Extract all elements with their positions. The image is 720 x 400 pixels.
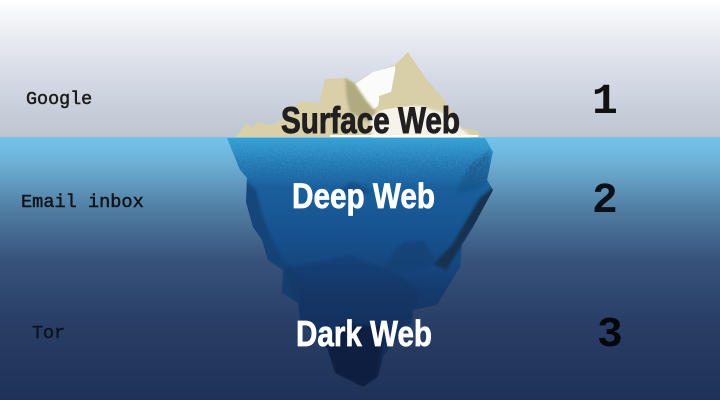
sea background [0,137,720,400]
iceberg below water [220,138,500,387]
sunlit facet [379,52,448,110]
centre facets [342,182,370,198]
label: Tor: Tor [32,323,65,344]
iceberg above water [235,52,482,137]
waterline highlight [330,135,478,137]
heading: Surface Web: Surface Web [281,100,460,141]
number 2: 2 [592,176,618,225]
lower snow band [370,106,472,137]
right shadow facet [434,186,498,270]
label: Google: Google [26,89,92,110]
sky background [0,0,720,137]
heading: Dark Web: Dark Web [296,313,432,354]
snow patch [355,66,396,114]
number 3: 3 [597,310,623,359]
dark keel [325,325,385,387]
number 1: 1 [592,77,618,126]
shaded face [345,78,376,124]
left shadow facet [246,180,286,270]
upper right facet [456,150,490,195]
heading: Deep Web: Deep Web [292,177,435,216]
label: Email inbox: Email inbox [21,192,144,213]
surface grain [227,138,493,180]
